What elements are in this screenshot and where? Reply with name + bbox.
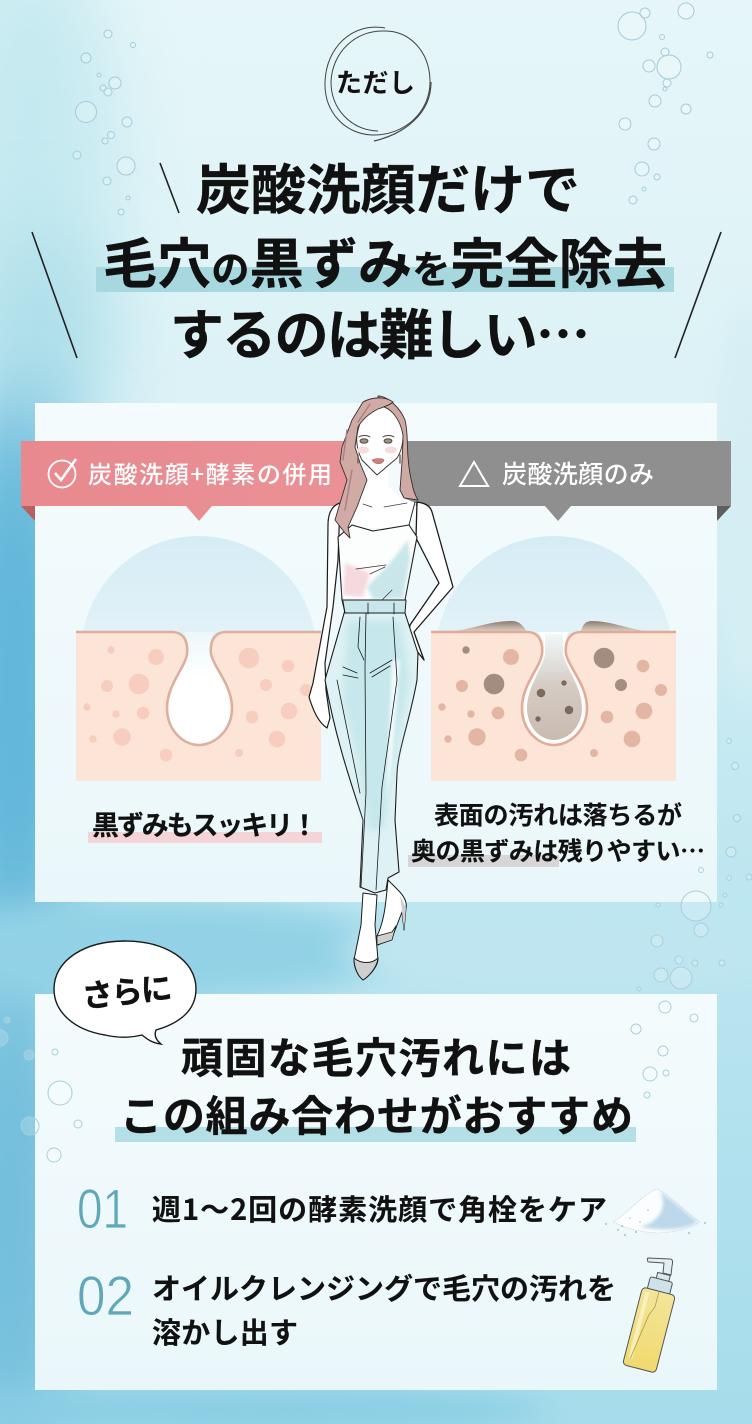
skin diagram: carbonated wash only — [431, 536, 676, 781]
panel: recommended combination — [0, 396, 752, 1390]
ribbon: carbonated wash plus enzyme — [21, 441, 348, 521]
icon: enzyme powder pile — [605, 1189, 706, 1236]
icon: triangle — [460, 462, 488, 486]
ribbon: carbonated wash plus enzyme: 炭酸洗顔+酵素の併用 — [88, 455, 332, 490]
caption: remaining blackheads: 表面の汚れは落ちるが — [434, 796, 682, 832]
belt — [342, 600, 406, 613]
label circle: ただし: ただし — [336, 63, 415, 100]
icon: check mark — [48, 459, 76, 488]
speech bubble: さらに — [54, 941, 196, 1044]
blush right — [385, 446, 397, 454]
illustration: woman — [309, 396, 453, 980]
hair front — [335, 398, 393, 538]
item 01 — [77, 1177, 607, 1240]
ribbon: carbonated wash only: 炭酸洗顔のみ — [502, 455, 654, 491]
item 02 — [77, 1264, 616, 1352]
blush left — [357, 446, 369, 454]
facial features — [359, 436, 394, 464]
panel: comparison — [21, 403, 731, 902]
trousers — [325, 610, 418, 893]
title — [96, 146, 674, 370]
collarbone — [363, 503, 407, 507]
heading — [115, 1025, 636, 1144]
face — [357, 406, 403, 475]
camisole — [338, 525, 417, 600]
item 01: 01 — [77, 1177, 128, 1240]
neck and shoulders — [338, 466, 416, 528]
heading: この組み合わせがおすすめ — [120, 1083, 633, 1144]
right shoe — [377, 880, 406, 945]
title: 毛穴の黒ずみを完全除去 — [103, 220, 667, 299]
item 01: 週1〜2回の酵素洗顔で角栓をケア — [152, 1187, 607, 1229]
earring — [358, 455, 400, 463]
bubbles upper — [73, 3, 713, 215]
bubbles lower — [0, 738, 752, 1162]
icon: cleansing oil bottle — [623, 1258, 680, 1373]
heading: 頑固な毛穴汚れには — [181, 1025, 571, 1086]
title slash right long — [675, 232, 721, 358]
ribbon: carbonated wash only — [405, 441, 731, 521]
caption: remaining blackheads — [408, 796, 705, 868]
caption: remaining blackheads: 奥の黒ずみは残りやすい… — [411, 832, 705, 868]
item 02: 02 — [77, 1264, 134, 1327]
skin diagram: with enzyme — [76, 536, 321, 781]
caption: clean pores: 黒ずみもスッキリ！ — [92, 804, 318, 843]
label circle: ただし — [325, 27, 431, 141]
speech bubble: さらに: さらに — [80, 962, 174, 1017]
left shoe — [354, 893, 378, 980]
item 02: オイルクレンジングで毛穴の汚れを — [152, 1266, 616, 1308]
title slash left short — [160, 163, 179, 213]
title: するのは難しい… — [170, 291, 590, 370]
strap — [409, 502, 415, 525]
right arm — [408, 502, 453, 660]
item 02: 溶かし出す — [152, 1310, 298, 1352]
hair back — [378, 396, 418, 500]
title slash left long — [32, 232, 77, 358]
title: 炭酸洗顔だけで — [196, 146, 580, 225]
left arm and hand — [309, 503, 340, 728]
